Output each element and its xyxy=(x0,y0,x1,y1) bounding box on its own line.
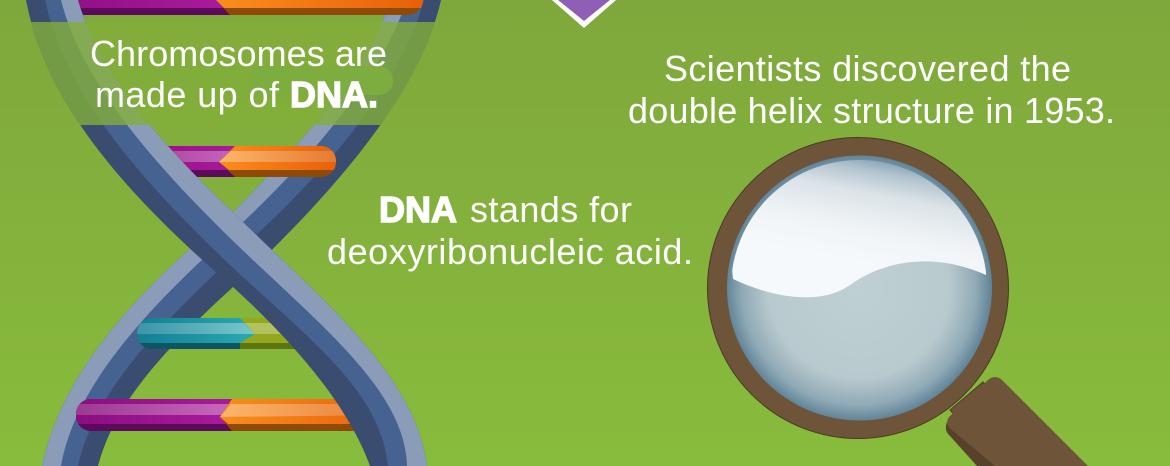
purple diamond pointer xyxy=(552,0,616,28)
rim xyxy=(708,138,1008,438)
icon: magnifying glass xyxy=(708,138,1088,466)
text: DNA stands for: DNA xyxy=(379,189,457,230)
rung: bottom purple and orange xyxy=(76,399,354,431)
text: DNA stands for xyxy=(327,189,693,272)
text: DNA stands for: stands for xyxy=(470,189,632,230)
rung: top purple and orange xyxy=(40,0,423,15)
DNA double helix xyxy=(26,0,441,466)
translucent label band xyxy=(31,22,435,125)
rung: teal and olive xyxy=(137,318,294,349)
handle xyxy=(946,377,1088,466)
text: chromosomes xyxy=(90,33,387,115)
text: scientists xyxy=(628,48,1115,131)
lens xyxy=(727,156,992,420)
text: chromosomes: DNA. xyxy=(290,74,378,115)
text: DNA stands for: deoxyribonucleic acid. xyxy=(327,231,693,272)
strand: top right to bottom left xyxy=(42,0,441,466)
lens highlight xyxy=(732,160,986,298)
text: scientists: Scientists discovered the xyxy=(664,48,1071,89)
strand: top left to bottom right xyxy=(26,0,427,466)
text: chromosomes: Chromosomes are xyxy=(90,33,387,74)
text: scientists: double helix structure in 1953. xyxy=(628,90,1115,131)
rung: second purple and orange xyxy=(168,146,336,177)
text: chromosomes: made up of xyxy=(95,74,280,115)
rung: faded green behind label xyxy=(340,66,393,95)
